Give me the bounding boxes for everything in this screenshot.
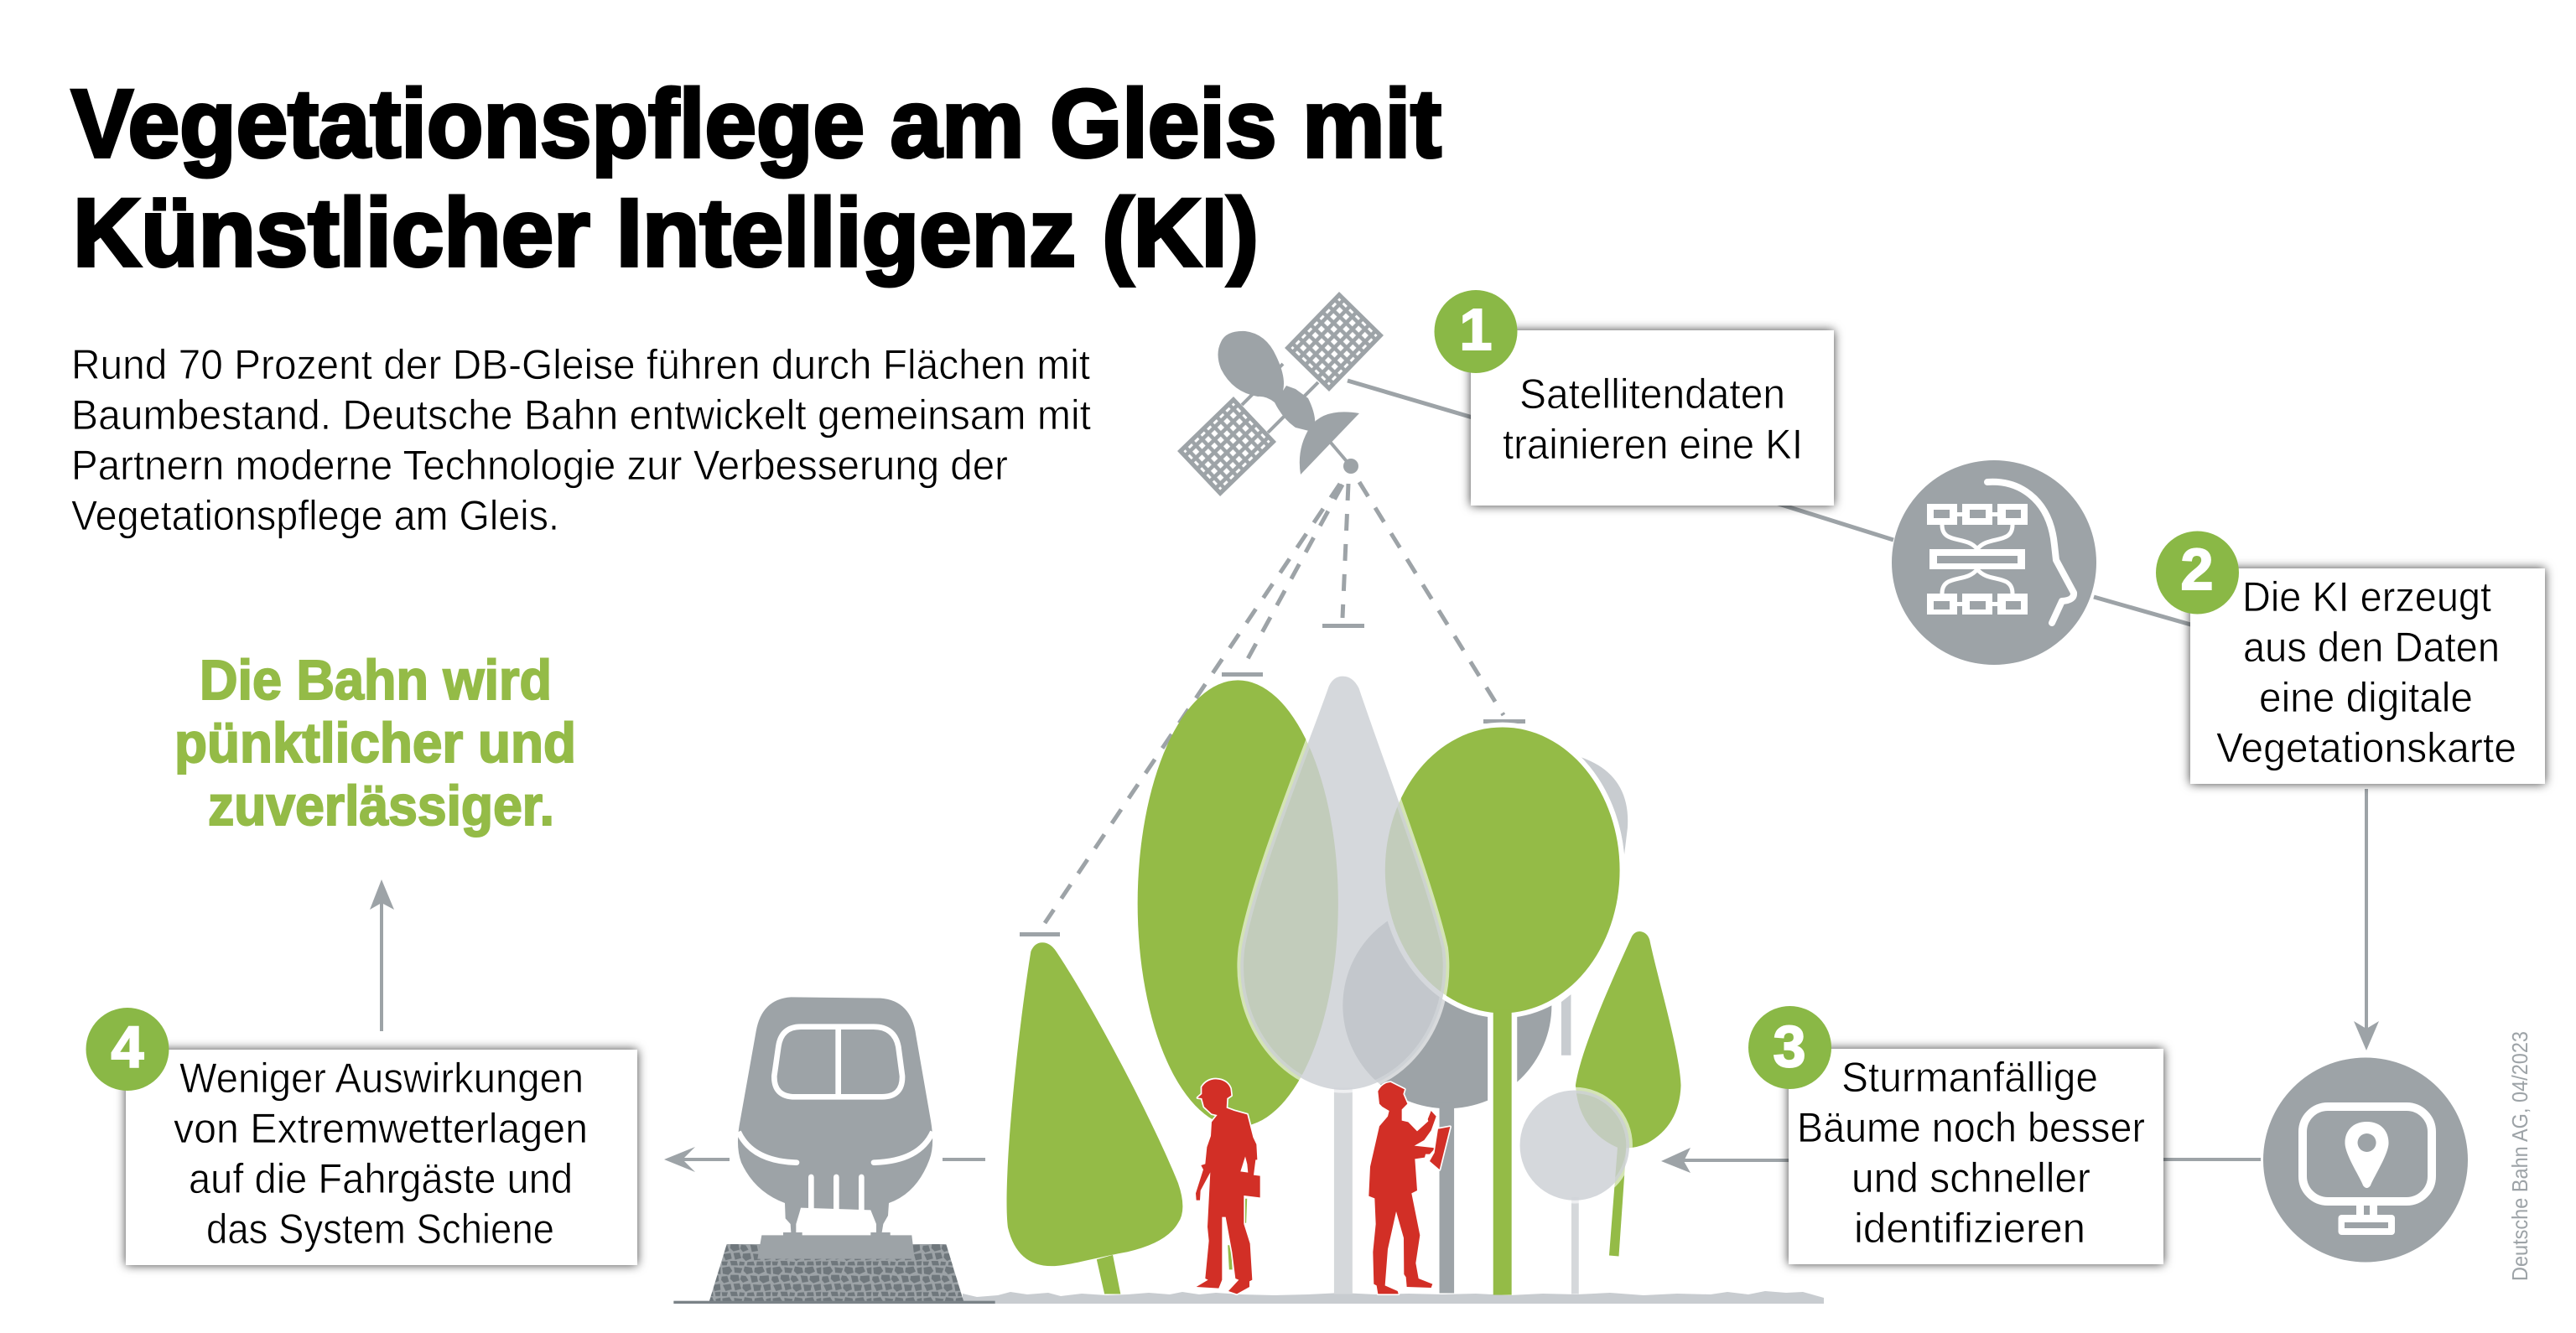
- tree: left green cone trunk: [1097, 1255, 1120, 1294]
- connector: card 1 to AI circle: [1776, 503, 1893, 540]
- beam end bars: [1020, 624, 1525, 936]
- panel: step 2: Vegetationskarte: [2216, 724, 2516, 771]
- intro text: Vegetationspflege am Gleis.: [71, 492, 559, 539]
- title: Vegetationspflege am Gleis mit: [71, 70, 1441, 178]
- panel: step 3: 3: [1774, 1014, 1805, 1079]
- sleeper block: [757, 1232, 915, 1259]
- panel: step 4: das System Schiene: [206, 1206, 554, 1253]
- panel: step 4: von Extremwetterlagen: [174, 1105, 588, 1152]
- train body: [738, 997, 932, 1232]
- connector: AI circle to card 2: [2094, 597, 2194, 625]
- map pin: [2345, 1122, 2389, 1188]
- trees: [1007, 677, 1681, 1295]
- arrow: train to left: [664, 1147, 730, 1172]
- green conclusion text: [174, 649, 576, 838]
- arrow: card 2 down to monitor circle: [2354, 789, 2379, 1050]
- panel: step 2: 2: [2181, 537, 2213, 602]
- train on track: [673, 997, 995, 1304]
- panel: step 2: aus den Daten: [2243, 624, 2500, 671]
- head outline: [1987, 482, 2074, 623]
- tree: translucent teardrop trunk: [1334, 1087, 1353, 1294]
- credit: Deutsche Bahn AG, 04/2023: [2507, 1031, 2532, 1281]
- green conclusion text: Die Bahn wird: [200, 649, 552, 712]
- train front lines: [739, 1132, 932, 1210]
- monitor: [2303, 1107, 2432, 1201]
- icon: monitor with map pin circle: [2263, 1058, 2468, 1263]
- arrow: card 3 to trees: [1661, 1148, 1794, 1173]
- panel: step 1: Satellitendaten: [1519, 371, 1785, 418]
- arrow: card 4 up to conclusion: [370, 879, 394, 1031]
- panel: step 4: Weniger Auswirkungen: [179, 1055, 584, 1102]
- monitor stand: [2338, 1204, 2395, 1235]
- intro text: Rund 70 Prozent der DB-Gleise führen durch Flächen mit: [71, 341, 1090, 388]
- title: Künstlicher Intelligenz (KI): [73, 179, 1259, 287]
- solar panel upper: [1285, 292, 1384, 392]
- panel: step 1: trainieren eine KI: [1503, 421, 1803, 468]
- satellite body: [1218, 331, 1359, 475]
- ballast: [709, 1244, 963, 1302]
- icon: AI head circle: [1892, 460, 2096, 665]
- rail base: [673, 1301, 995, 1304]
- tree: large green round: [1385, 727, 1620, 1295]
- scan beams: [1045, 482, 1504, 923]
- panel: step 4: auf die Fahrgäste und: [189, 1155, 573, 1202]
- panel: step 4: [86, 1008, 637, 1265]
- tree: small light circle: [1520, 1091, 1629, 1201]
- satellite: [1177, 292, 1384, 496]
- tree: small green cone: [1576, 931, 1681, 1257]
- train window: [774, 1027, 902, 1097]
- panel: step 3: [1748, 1006, 2163, 1264]
- panel: step 1: 1: [1460, 297, 1492, 362]
- worker right: [1368, 1082, 1450, 1294]
- panel: step 1: [1434, 290, 1834, 506]
- tree: far back trunk: [1561, 994, 1571, 1056]
- tree: translucent teardrop: [1240, 677, 1446, 1090]
- title: [71, 70, 1441, 287]
- tree: left green cone: [1007, 942, 1182, 1266]
- tree: tall green ellipse: [1138, 680, 1338, 1269]
- worker left: [1196, 1079, 1260, 1294]
- connector: trees to train: [943, 1158, 985, 1161]
- tree: small light circle trunk: [1571, 1197, 1579, 1294]
- panel: step 4: 4: [112, 1014, 144, 1080]
- workers: [1196, 1079, 1450, 1294]
- panel: step 2: eine digitale: [2259, 674, 2473, 721]
- intro text: Partnern moderne Technologie zur Verbesserung der: [71, 442, 1008, 489]
- intro text: [71, 341, 1091, 539]
- panel: step 3: Sturmanfällige: [1841, 1054, 2098, 1101]
- panel: step 3: Bäume noch besser: [1797, 1104, 2145, 1151]
- tree: dark grey round: [1343, 903, 1551, 1293]
- panel: step 2: Die KI erzeugt: [2242, 573, 2491, 620]
- panel: step 3: und schneller: [1852, 1154, 2090, 1201]
- connector: satellite to card 1: [1348, 381, 1472, 418]
- tree: far back sliver: [1581, 757, 1628, 854]
- solar panel lower: [1177, 397, 1276, 496]
- green conclusion text: zuverlässiger.: [208, 775, 554, 838]
- connector: monitor circle to card 3: [2159, 1158, 2261, 1161]
- green conclusion text: pünktlicher und: [174, 712, 576, 775]
- panel: step 2: [2156, 532, 2545, 784]
- panel: step 3: identifizieren: [1854, 1205, 2085, 1252]
- ground: [963, 1291, 1824, 1304]
- intro text: Baumbestand. Deutsche Bahn entwickelt gemeinsam mit: [71, 392, 1091, 438]
- network diagram: [1927, 504, 2028, 615]
